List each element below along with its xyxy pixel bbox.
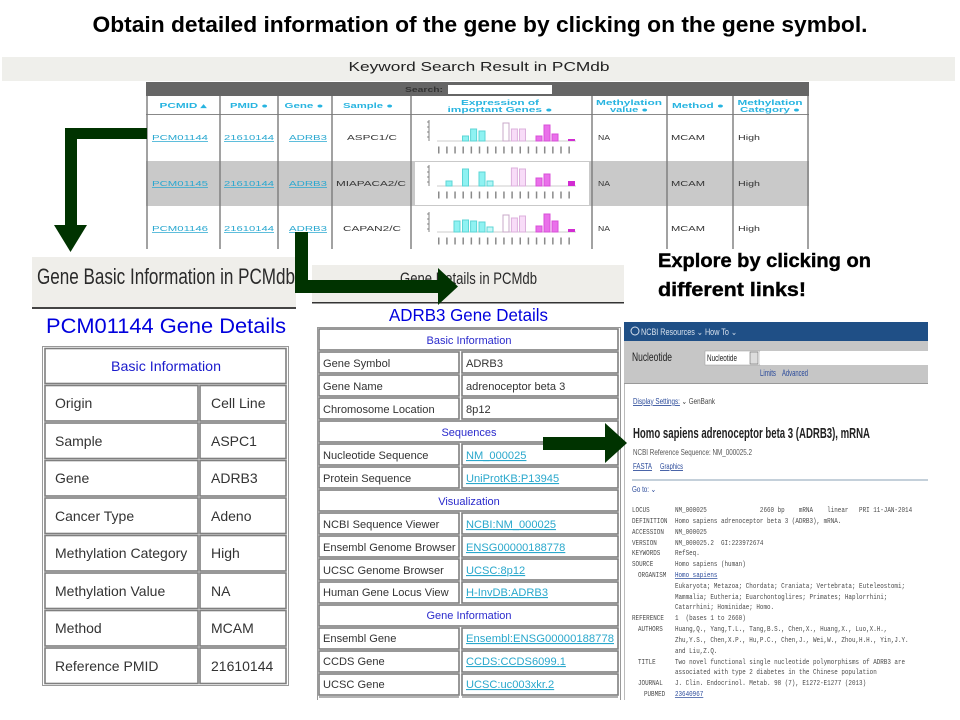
table rows background (146, 96, 809, 249)
column headers: important Genes ● (448, 107, 552, 114)
row: PCM01146: ADRB3 (289, 224, 327, 233)
gene details table (318, 328, 620, 700)
column headers: PMID ● (230, 103, 268, 110)
GenBank record text: Huang,Q., Yang,T.L., Tang,B.S., Chen,X., Huang,X., Luo,X.H., (675, 626, 887, 633)
GenBank record text: TITLE (638, 659, 656, 666)
gene details heading: PCM01144 Gene Details (46, 315, 286, 338)
GenBank record text: Homo sapiens (675, 572, 717, 579)
FASTA and Graphics links: Graphics (660, 461, 683, 471)
basic information table (42, 346, 288, 686)
basic information table: Methylation Category (55, 545, 187, 561)
GenBank record text: associated with type 2 diabetes in the Chinese population (675, 669, 877, 676)
nucleotide search bar: Limits (760, 368, 776, 378)
GenBank record text (632, 507, 912, 698)
basic information table: Cell Line (211, 395, 266, 411)
basic information table: Method (55, 620, 102, 636)
gene details table: Gene Symbol (323, 358, 390, 370)
gene details table: Ensembl:ENSG00000188778 (466, 633, 614, 645)
gene details table: Gene Name (323, 381, 383, 393)
arrow: gene details to NCBI page (543, 423, 627, 463)
row: PCM01146: MCAM (671, 224, 705, 233)
column headers: Category ● (740, 107, 800, 114)
NCBI top bar (624, 322, 928, 341)
GenBank record text: 1 (bases 1 to 2660) (675, 615, 746, 622)
GenBank record text: DEFINITION (632, 518, 667, 525)
GenBank record text: Two novel functional single nucleotide polymorphisms of ADRB3 are (675, 659, 905, 666)
search bar (146, 82, 809, 96)
title: Obtain detailed information of the gene by clicking on the gene symbol. (92, 12, 868, 37)
column headers: Methylation (738, 100, 802, 107)
GenBank record text: Catarrhini; Hominidae; Homo. (675, 604, 774, 611)
row: PCM01146: NA (598, 224, 610, 233)
gene details table: Basic Information (427, 335, 511, 347)
basic information table: Sample (55, 433, 103, 449)
GenBank record text: REFERENCE (632, 615, 664, 622)
NCBI top bar: NCBI Resources ⌄ How To ⌄ (641, 327, 737, 337)
row: PCM01144: 21610144 (224, 133, 274, 142)
GenBank record text: VERSION (632, 540, 657, 547)
GenBank record text: Mammalia; Eutheria; Euarchontoglires; Primates; Haplorrhini; (675, 594, 887, 601)
row: PCM01145: ADRB3 (289, 179, 327, 188)
panel header (312, 265, 624, 304)
callout: explore links: Explore by clicking on (658, 250, 871, 272)
bar chart: row 1 expression (427, 120, 576, 150)
gene details table: Human Gene Locus View (323, 587, 450, 599)
basic information table: Basic Information (111, 358, 221, 374)
basic information table: ASPC1 (211, 433, 257, 449)
row: PCM01144: MCAM (671, 133, 705, 142)
GenBank record text: Zhu,Y.S., Chen,X.P., Hu,P.C., Chen,J., Wei,W., Zhou,H.H., Yin,J.Y. (675, 637, 909, 644)
row: PCM01145: High (738, 179, 760, 188)
bar chart: row 2 expression (427, 165, 576, 195)
FASTA and Graphics links: FASTA (633, 461, 652, 471)
GenBank record text: ORGANISM (638, 572, 666, 579)
GenBank record text: KEYWORDS (632, 550, 660, 557)
gene details table: Nucleotide Sequence (323, 450, 428, 462)
basic information table: High (211, 545, 240, 561)
gene details heading: ADRB3 Gene Details (389, 305, 548, 325)
row: PCM01145: MIAPACA2/C (336, 179, 407, 188)
panel header: Gene Basic Information in PCMdb (37, 264, 295, 289)
panel: ADRB3 gene details (312, 265, 624, 700)
nucleotide search bar: Advanced (782, 368, 808, 378)
row: PCM01145: NA (598, 179, 610, 188)
GenBank record text: NM_000025 (675, 529, 707, 536)
gene details table: CCDS:CCDS6099.1 (466, 656, 566, 668)
gene details table: Gene Information (426, 610, 512, 622)
column headers: PCMID ▴ (160, 103, 207, 110)
column headers: Sample ● (343, 103, 393, 110)
table heading band (2, 57, 955, 81)
GenBank record text: J. Clin. Endocrinol. Metab. 98 (7), E1272-E1277 (2013) (675, 680, 866, 687)
column headers (160, 100, 802, 114)
basic information table: Methylation Value (55, 583, 165, 599)
row: PCM01144: High (738, 133, 760, 142)
basic information table: Cancer Type (55, 508, 134, 524)
gene details table: UCSC:uc003xkr.2 (466, 679, 554, 691)
gene details table: 8p12 (466, 404, 491, 416)
row: PCM01144: ADRB3 (289, 133, 327, 142)
panel: keyword search result table (2, 57, 955, 249)
row: PCM01146: CAPAN2/C (343, 224, 402, 233)
gene details table: Ensembl Genome Browser (323, 542, 456, 554)
display settings: Display Settings: ⌄ GenBank (633, 396, 716, 406)
row: PCM01146: PCM01146 (152, 224, 208, 233)
GenBank record text: Homo sapiens adrenoceptor beta 3 (ADRB3), mRNA. (675, 518, 841, 525)
GenBank record text: 23640967 (675, 691, 703, 698)
basic information table: MCAM (211, 620, 254, 636)
GenBank record text: RefSeq. (675, 550, 700, 557)
search bar: Search: (405, 87, 443, 94)
gene details table: NCBI Sequence Viewer (323, 519, 440, 531)
GenBank record text: ACCESSION (632, 529, 664, 536)
row: PCM01144 (152, 133, 760, 142)
row: PCM01146: 21610144 (224, 224, 274, 233)
panel header (32, 257, 296, 309)
gene details table: UCSC:8p12 (466, 565, 525, 577)
table heading band: Keyword Search Result in PCMdb (348, 59, 610, 74)
row: PCM01145: PCM01145 (152, 179, 208, 188)
GenBank record text: LOCUS (632, 507, 650, 514)
gene details table: UCSC Gene (323, 679, 385, 691)
basic information table: NA (211, 583, 231, 599)
row: PCM01144: PCM01144 (152, 133, 208, 142)
row: PCM01146: High (738, 224, 760, 233)
row: PCM01145: 21610144 (224, 179, 274, 188)
row: PCM01146 (152, 224, 760, 233)
panel header: Gene Details in PCMdb (400, 269, 537, 288)
nucleotide search bar (624, 341, 928, 384)
gene details table: ENSG00000188778 (466, 542, 565, 554)
gene details table: UCSC Genome Browser (323, 565, 444, 577)
bar chart: row 3 expression (427, 212, 576, 241)
basic information table: ADRB3 (211, 470, 258, 486)
column headers: Gene ● (284, 103, 324, 110)
basic information table: Adeno (211, 508, 252, 524)
GenBank record text: PUBMED (644, 691, 665, 698)
callout: explore links (658, 250, 871, 301)
gene details table: NCBI:NM_000025 (466, 519, 556, 531)
GenBank record text: NM_000025.2 GI:223972674 (675, 540, 764, 547)
column headers: value ● (610, 107, 648, 114)
gene details table: H-InvDB:ADRB3 (466, 587, 548, 599)
gene details table: Protein Sequence (323, 473, 411, 485)
gene details table: CCDS Gene (323, 656, 385, 668)
GenBank record text: Eukaryota; Metazoa; Chordata; Craniata; Vertebrata; Euteleostomi; (675, 583, 905, 590)
GenBank record text: Homo sapiens (human) (675, 561, 746, 568)
column headers: Expression of (461, 100, 540, 107)
gene details table: adrenoceptor beta 3 (466, 381, 565, 393)
row: PCM01145 (152, 179, 760, 188)
gene details table: Sequences (441, 427, 497, 439)
GenBank record text: NM_000025 2660 bp mRNA linear PRI 11-JAN-2014 (675, 507, 912, 514)
column headers: Methylation (596, 100, 662, 107)
FASTA and Graphics links (633, 461, 683, 471)
row: PCM01144: ASPC1/C (347, 133, 398, 142)
row: PCM01144: NA (598, 133, 610, 142)
panel: NCBI nucleotide page (624, 322, 928, 700)
gene details table: UniProtKB:P13945 (466, 473, 559, 485)
nucleotide search bar: Nucleotide (632, 350, 672, 364)
gene details table: Ensembl Gene (323, 633, 396, 645)
nucleotide search bar: Nucleotide (707, 353, 737, 363)
gene details table: ADRB3 (466, 358, 503, 370)
basic information table: 21610144 (211, 658, 274, 674)
go to link: Go to: ⌄ (632, 484, 656, 494)
basic information table: Reference PMID (55, 658, 158, 674)
GenBank record text: and Liu,Z.Q. (675, 648, 717, 655)
callout: explore links: different links! (658, 279, 806, 301)
GenBank record text: AUTHORS (638, 626, 663, 633)
column headers: Method ● (672, 103, 724, 110)
reference sequence line: NCBI Reference Sequence: NM_000025.2 (633, 447, 752, 457)
basic information table: Gene (55, 470, 89, 486)
gene details table: Visualization (438, 496, 500, 508)
panel: gene basic information (32, 257, 296, 686)
GenBank record text: JOURNAL (638, 680, 663, 687)
row: PCM01145: MCAM (671, 179, 705, 188)
basic information table: Origin (55, 395, 92, 411)
arrow: table to gene basic information (54, 128, 147, 252)
arrow: gene symbol to gene details (295, 232, 458, 305)
gene details table: NM_000025 (466, 450, 526, 462)
gene details table: Chromosome Location (323, 404, 435, 416)
GenBank record text: SOURCE (632, 561, 653, 568)
